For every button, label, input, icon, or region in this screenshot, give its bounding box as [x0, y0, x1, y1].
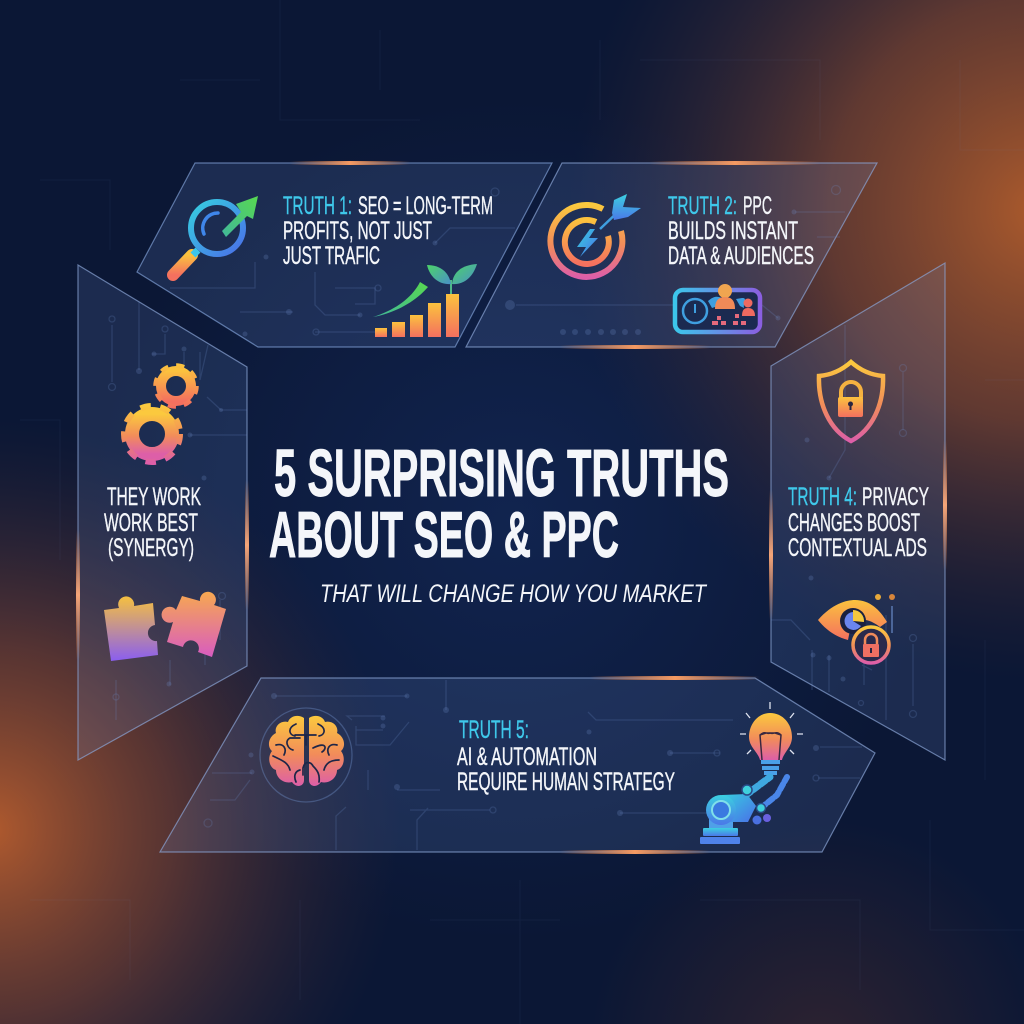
text: truth 1: JUST TRAFIC	[283, 242, 380, 270]
text: synergy	[104, 483, 201, 562]
text: truth 4	[788, 483, 929, 562]
panel 4 circuit traces	[771, 325, 916, 720]
text: truth 2: DATA & AUDIENCES	[668, 242, 814, 270]
icon: gears	[124, 366, 196, 462]
text: synergy: THEY WORK	[107, 483, 201, 511]
text: truth 4: PRIVACY	[862, 483, 929, 511]
icon: audience dashboard	[675, 284, 760, 332]
icon: puzzle pieces	[104, 592, 226, 661]
text: truth 5: AI & AUTOMATION	[457, 743, 597, 771]
text: truth 2	[668, 192, 814, 270]
panel 2 circuit traces	[505, 186, 845, 335]
title: ABOUT SEO & PPC	[269, 498, 619, 571]
panel: truth 2	[466, 163, 877, 347]
title	[269, 436, 729, 571]
panel: truth 5	[160, 678, 875, 852]
text: truth 4: TRUTH 4:	[788, 483, 857, 511]
text: truth 2: TRUTH 2:	[668, 192, 737, 220]
text: truth 1	[283, 192, 493, 270]
panel 5 circuit traces	[204, 680, 862, 850]
text: truth 5: REQUIRE HUMAN STRATEGY	[457, 768, 675, 796]
text: truth 4: CHANGES BOOST	[788, 509, 920, 537]
icon: growth bars with sprout	[373, 264, 477, 337]
text: truth 1: SEO = LONG-TERM	[358, 192, 493, 220]
text: truth 1: TRUTH 1:	[283, 192, 352, 220]
icon: light bulb on robot arm	[700, 702, 803, 844]
text: truth 5: TRUTH 5:	[459, 716, 529, 744]
subtitle: THAT WILL CHANGE HOW YOU MARKET	[320, 580, 707, 608]
panel 3 circuit traces	[108, 302, 247, 720]
panel: truth 1	[137, 163, 552, 347]
icon: shield with lock	[819, 362, 883, 441]
text: truth 2: BUILDS INSTANT	[668, 217, 798, 245]
text: truth 4: CONTEXTUAL ADS	[788, 534, 927, 562]
icon: magnifier with growth arrow	[173, 196, 258, 275]
panel: truth 4	[771, 263, 945, 760]
text: synergy: WORK BEST	[104, 509, 198, 537]
icon: brain	[260, 708, 352, 802]
icon: target with arrow	[550, 194, 641, 277]
text: synergy: (SYNERGY)	[108, 534, 194, 562]
glows on panel edges	[76, 161, 947, 854]
text: truth 1: PROFITS, NOT JUST	[283, 217, 432, 245]
icon: eye with lock	[818, 594, 895, 663]
title: 5 SURPRISING TRUTHS	[274, 436, 729, 511]
text: truth 2: PPC	[743, 192, 772, 220]
panel: synergy	[78, 265, 247, 760]
text: truth 5	[457, 716, 675, 796]
panel 1 circuit traces	[170, 188, 515, 336]
